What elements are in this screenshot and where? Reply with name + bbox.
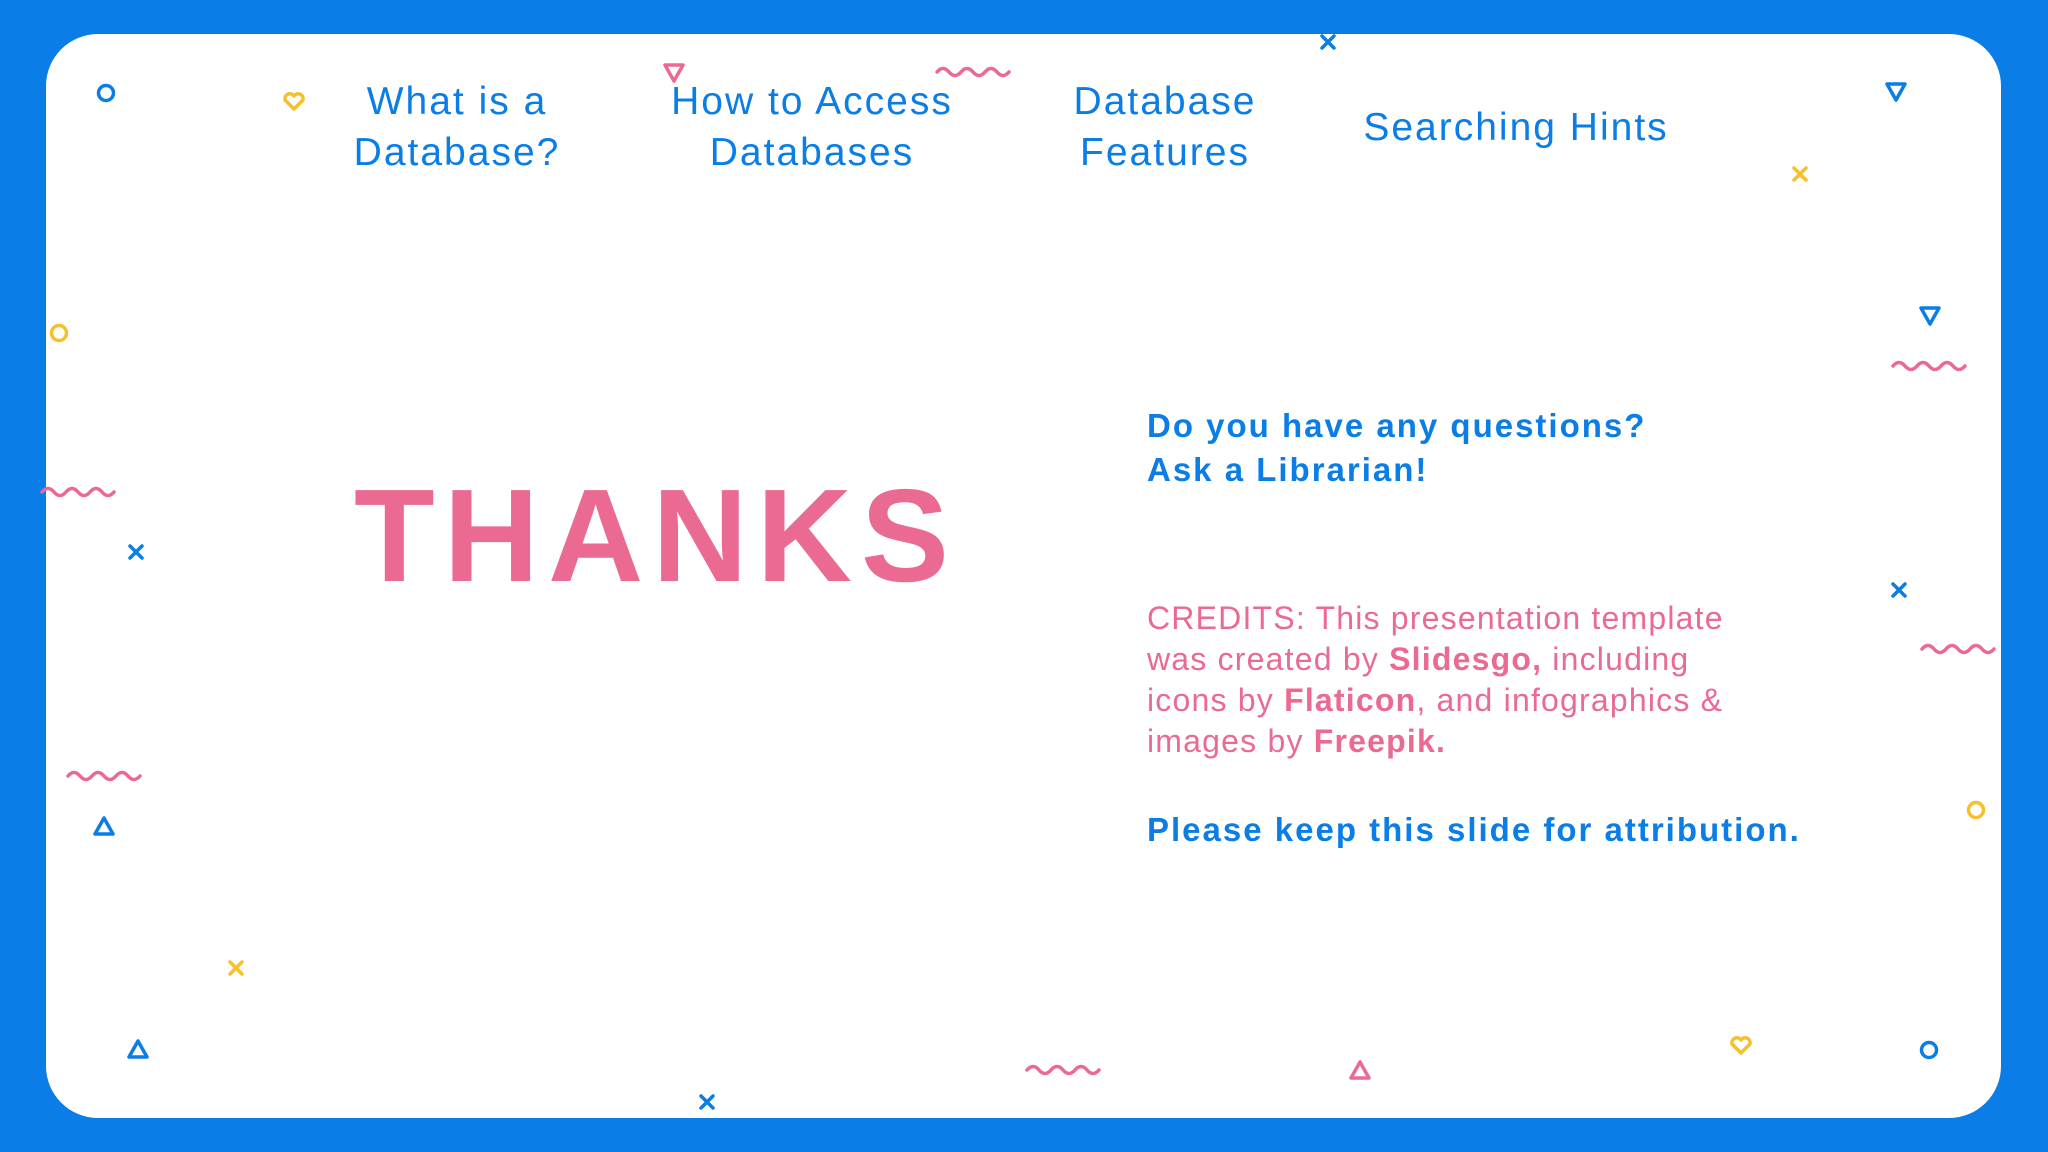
text block: credits: CREDITS: This presentation template was created by Slidesgo, including icons by Flaticon, and infographics & images by Freepik. (1147, 600, 1724, 759)
nav: What is a Database (354, 80, 560, 174)
nav: What is a Database: Database? (354, 131, 560, 174)
nav: How to Access Databases: Databases (710, 131, 914, 174)
nav: How to Access Databases: How to Access (671, 80, 953, 123)
text block: questions: Ask a Librarian! (1147, 451, 1428, 488)
nav: Database Features: Database (1074, 80, 1256, 123)
nav: Database Features: Features (1080, 131, 1250, 174)
title: THANKS: THANKS (354, 462, 958, 609)
text block: attribution note: Please keep this slide for attribution. (1147, 811, 1801, 848)
text block: questions: Do you have any questions? (1147, 407, 1646, 444)
nav: Searching Hints: Searching Hints (1363, 106, 1669, 149)
nav: How to Access Databases (671, 80, 953, 174)
nav: Database Features (1074, 80, 1256, 174)
text block: questions (1147, 407, 1646, 488)
nav: What is a Database: What is a (367, 80, 547, 123)
